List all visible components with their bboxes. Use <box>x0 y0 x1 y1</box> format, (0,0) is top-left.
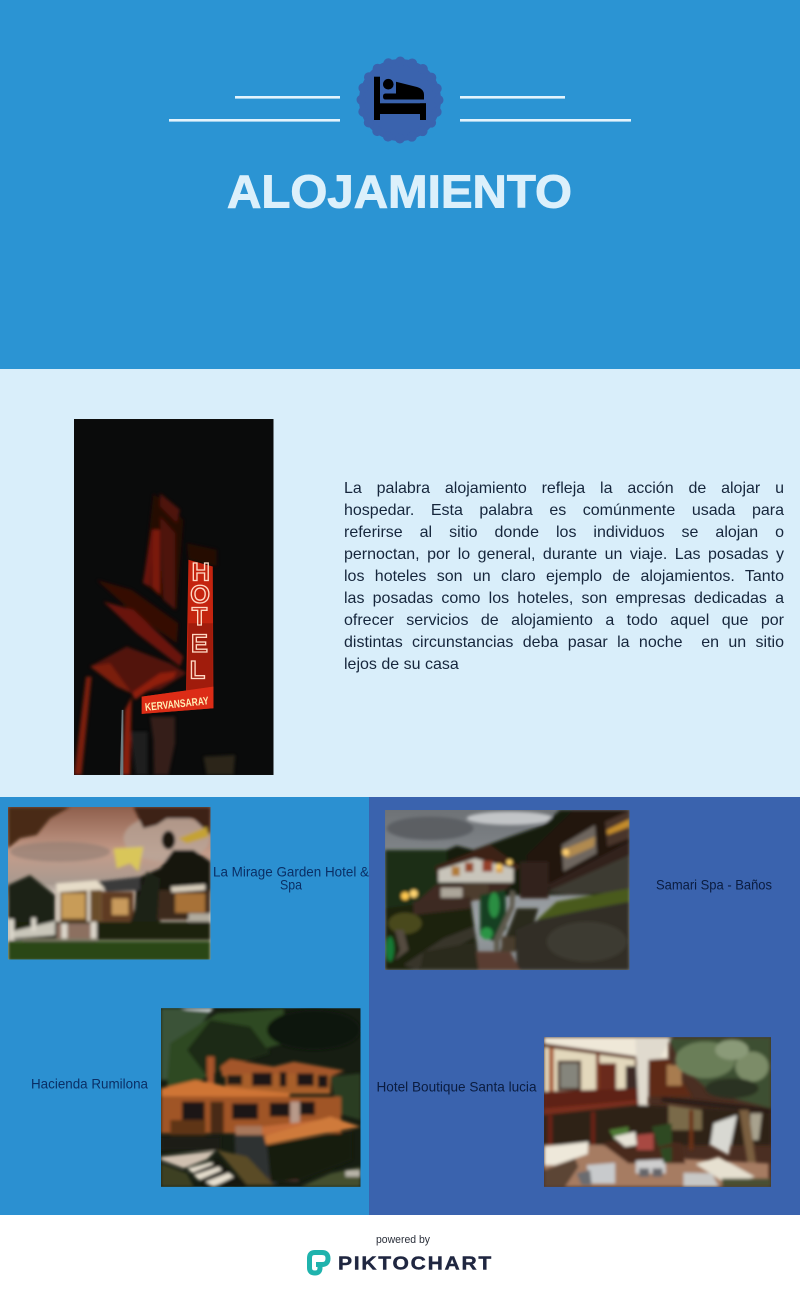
photo: neon hotel sign: KERVANSARAY <box>144 695 210 714</box>
body text: referirse al sitio donde los individuos se alojan o <box>344 524 784 540</box>
body text: ofrecer servicios de alojamiento a todo aquel que por <box>344 612 784 628</box>
panel: left hotels <box>0 797 369 1215</box>
icon: piktochart logo <box>310 1252 328 1273</box>
footer band <box>0 1215 800 1295</box>
panel: right hotels <box>369 797 800 1215</box>
body text: las posadas como los hoteles, son empresas dedicadas a <box>344 590 784 606</box>
footer: powered by: powered by <box>376 1234 430 1246</box>
caption: Hacienda Rumilona: Hacienda Rumilona <box>31 1076 148 1092</box>
photo: Hotel Boutique Santa lucia <box>544 1037 771 1187</box>
body text: La palabra alojamiento refleja la acción de alojar u <box>344 480 784 496</box>
left header lines <box>169 96 340 122</box>
right header lines <box>460 96 631 122</box>
caption: La Mirage Garden Hotel & Spa: Spa <box>280 878 302 892</box>
caption: La Mirage Garden Hotel & Spa: La Mirage Garden Hotel & <box>213 864 369 880</box>
intro band <box>0 369 800 797</box>
photo: neon hotel sign: T <box>192 603 208 631</box>
body text: distintas circunstancias deba pasar la noche en un sitio <box>344 634 784 650</box>
body text: lejos de su casa <box>344 656 459 672</box>
body text: pernoctan, por lo general, durante un viaje. Las posadas y <box>344 546 784 562</box>
wordmark: piktochart: PIKTOCHART <box>338 1252 493 1274</box>
title: ALOJAMIENTO <box>227 166 572 218</box>
caption: Samari Spa: Samari Spa - Baños <box>656 878 772 892</box>
photo: Samari Spa <box>385 810 630 970</box>
photo: neon hotel sign: H <box>192 558 210 586</box>
icon: bed badge <box>359 59 441 141</box>
photo: Hacienda Rumilona <box>161 1008 360 1187</box>
header band <box>0 0 800 369</box>
caption: La Mirage Garden Hotel & Spa <box>213 864 369 892</box>
photo: neon hotel sign: O <box>190 581 210 609</box>
body text <box>344 480 784 672</box>
photo: neon hotel sign: L <box>190 657 205 685</box>
body text: los hoteles son un claro ejemplo de alojamientos. Tanto <box>344 568 784 584</box>
body text: hospedar. Esta palabra es comúnmente usada para <box>344 502 784 518</box>
photo: neon hotel sign <box>74 419 274 775</box>
photo: La Mirage Garden Hotel <box>8 807 210 960</box>
caption: Hotel Boutique Santa lucia: Hotel Boutique Santa lucia <box>376 1080 537 1094</box>
photo: neon hotel sign: E <box>191 630 208 658</box>
